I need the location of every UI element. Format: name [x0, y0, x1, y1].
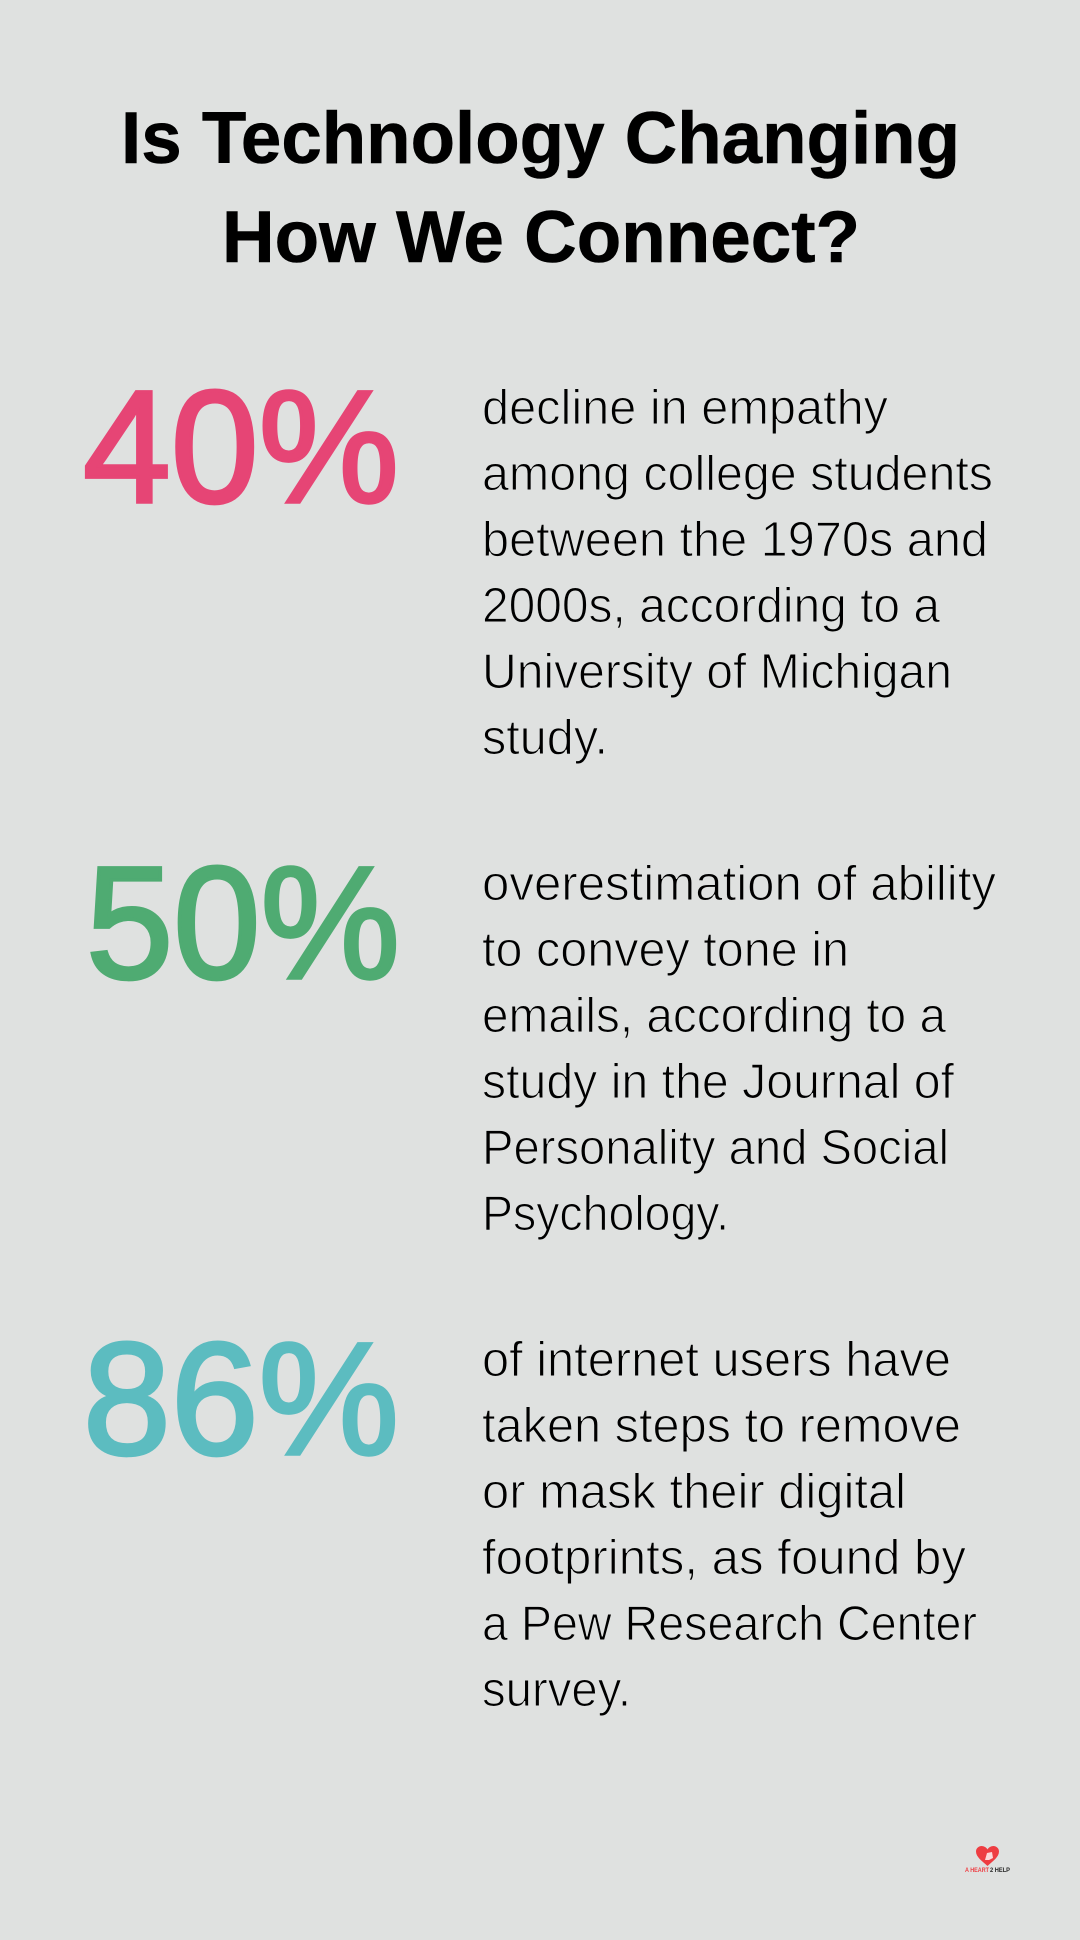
text block: overestimation of ability: emails, according to a — [482, 989, 947, 1043]
text block: of internet users: taken steps to remove — [482, 1399, 961, 1453]
text block: overestimation of ability: Personality and Social — [482, 1121, 949, 1175]
text block: decline in empathy: 2000s, according to a — [482, 579, 941, 633]
text block: decline in empathy: among college students — [482, 447, 993, 501]
panel: 50% statistic — [86, 833, 996, 1241]
title — [121, 98, 960, 278]
text block: decline in empathy: University of Michigan — [482, 645, 952, 699]
text block: decline in empathy: study. — [482, 711, 608, 765]
text block: of internet users: footprints, as found by — [482, 1531, 966, 1585]
text block: of internet users: of internet users have — [482, 1333, 951, 1387]
text block: overestimation of ability — [482, 857, 996, 1241]
text block: of internet users — [482, 1333, 977, 1717]
text block: of internet users: or mask their digital — [482, 1465, 906, 1519]
text block: overestimation of ability: overestimation of ability — [482, 857, 996, 911]
text block: overestimation of ability: to convey tone in — [482, 923, 849, 977]
icon: A Heart 2 Help logo: 2 HELP — [990, 1868, 1010, 1874]
text block: overestimation of ability: study in the Journal of — [482, 1055, 954, 1109]
text block: of internet users: survey. — [482, 1663, 631, 1717]
number: 40%: 40% — [83, 357, 399, 536]
icon: A Heart 2 Help logo: A HEART — [965, 1868, 989, 1874]
title: Is Technology Changing — [121, 98, 960, 179]
panel: 40% statistic — [83, 357, 993, 765]
text block: decline in empathy: decline in empathy — [482, 381, 888, 435]
title: How We Connect? — [222, 197, 860, 278]
text block: of internet users: a Pew Research Center — [482, 1597, 977, 1651]
text block: decline in empathy — [482, 381, 993, 765]
text block: decline in empathy: between the 1970s and — [482, 513, 988, 567]
text block: overestimation of ability: Psychology. — [482, 1187, 729, 1241]
number: 86%: 86% — [83, 1309, 399, 1488]
panel: 86% statistic — [83, 1309, 977, 1717]
number: 50%: 50% — [86, 833, 400, 1012]
icon: A Heart 2 Help logo — [965, 1846, 1010, 1874]
